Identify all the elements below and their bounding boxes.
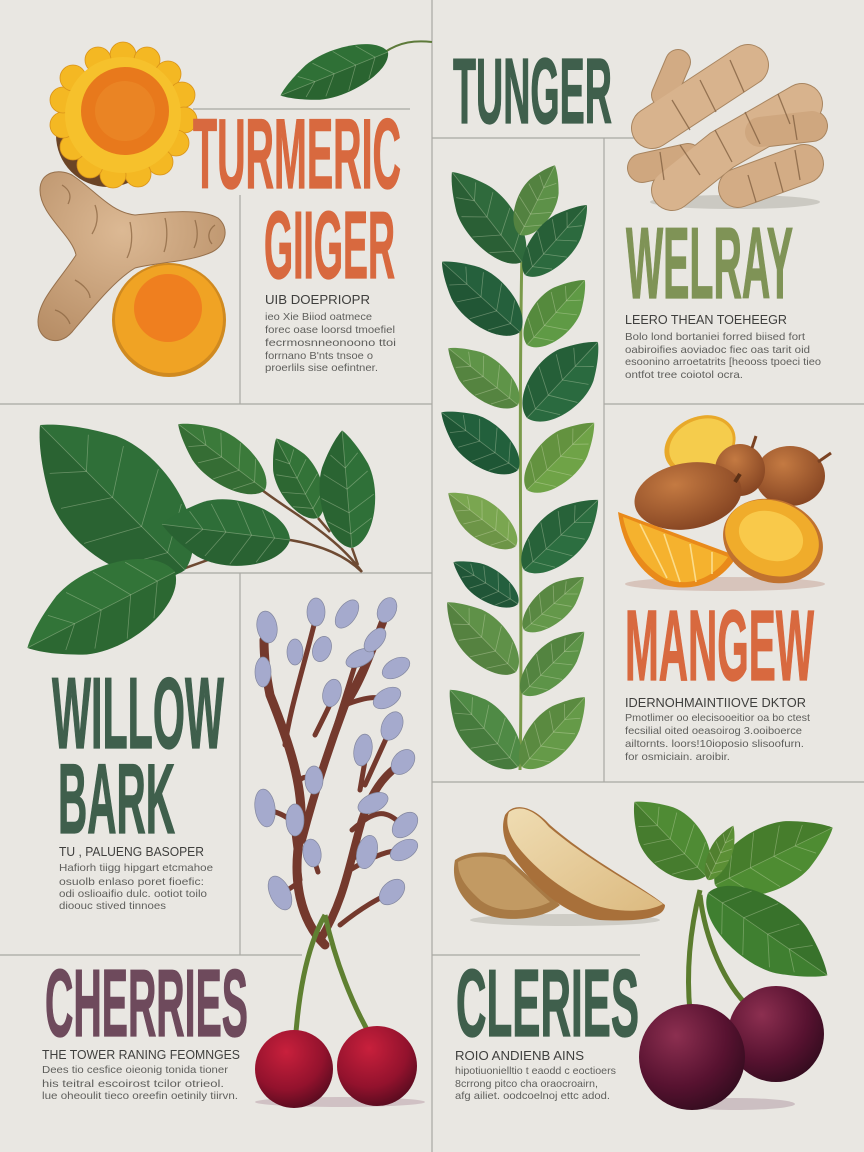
infographic canvas: BARK — [58, 743, 175, 854]
text block: mangew — [625, 696, 810, 763]
text block: willow bark: odi oslioaifio dulc. ootiot toilo — [59, 888, 207, 900]
text block: welray: LEERO THEAN TOEHEEGR — [625, 313, 787, 327]
text block: turmeric — [265, 293, 396, 374]
text block: willow bark: dioouc stived tinnoes — [59, 900, 166, 912]
text block: cherries right — [455, 1049, 616, 1102]
infographic canvas: GIIGER — [264, 192, 395, 299]
icon: cherries with leaves — [614, 782, 847, 1110]
infographic canvas: TUNGER — [453, 39, 612, 143]
text block: mangew: IDERNOHMAINTIIOVE DKTOR — [625, 696, 806, 710]
text block: cherries right: afg ailiet. oodcoelnoj ettc adod. — [455, 1090, 610, 1102]
text block: cherries left: THE TOWER RANING FEOMNGES — [42, 1048, 240, 1062]
text block: mangew: fecsilial oited oeasoirog 3.ooiboerce — [625, 725, 802, 737]
text block: turmeric: ieo Xie Biiod oatmece — [265, 311, 372, 323]
text block: mangew: ailtornts. loors!10ioposio slisoofurn. — [625, 738, 804, 750]
text block: turmeric: proerlils sise oefintner. — [265, 362, 378, 374]
text block: cherries left — [42, 1048, 240, 1102]
text block: mangew: Pmotlimer oo elecisooeitior oa bo ctest — [625, 712, 810, 724]
central fern stem with leaves — [425, 157, 618, 783]
icon: ginger root — [642, 60, 820, 209]
text block: mangew: for osmiciain. aroibir. — [625, 751, 730, 763]
text block: welray: esoonino arroetatrits [heooss tpoeci tieo — [625, 356, 821, 368]
icon: nuts — [454, 807, 665, 926]
icon: large green leaf branch — [1, 386, 380, 683]
text block: cherries right: ROIO ANDIENB AINS — [455, 1049, 584, 1063]
text block: turmeric: fecrmosnneonoono ttoi — [265, 337, 396, 349]
text block: cherries right: hipotiuonielltio t eaodd c eoctioers — [455, 1065, 616, 1077]
text block: cherries left: Dees tio cesfice oieonig tonida tioner — [42, 1064, 229, 1076]
infographic canvas: CHERRIES — [45, 950, 248, 1057]
text block: turmeric: forec oase loorsd tmoefiel — [265, 324, 395, 336]
text block: willow bark: Hafiorh tiigg hipgart etcmahoe — [59, 862, 213, 874]
icon: pair of red cherries — [255, 915, 425, 1108]
text block: cherries left: his teitral escoirost tcilor otrieol. — [42, 1078, 224, 1090]
text block: cherries right: 8crrong pitco cha oraocroairn, — [455, 1078, 598, 1090]
infographic canvas: TURMERIC — [193, 98, 401, 209]
icon: willow branch with catkins — [252, 594, 423, 945]
text block: welray — [625, 313, 821, 381]
infographic canvas: WILLOW — [52, 658, 224, 770]
infographic canvas: CLERIES — [456, 950, 639, 1057]
text block: willow bark — [59, 845, 213, 912]
text block: cherries left: lue oheoulit tieco oreefin oetinily tiirvn. — [42, 1090, 238, 1102]
text block: turmeric: forrnano B'nts tnsoe o — [265, 350, 373, 362]
text block: welray: Bolo lond bortaniei forred biised fort — [625, 331, 805, 343]
icon: mango fruits — [618, 404, 835, 597]
icon: turmeric root and slice — [38, 172, 226, 377]
text block: welray: ontfot tree coiotol ocra. — [625, 369, 743, 381]
text block: willow bark: TU , PALUENG BASOPER — [59, 845, 204, 859]
icon: small top leaf — [272, 31, 432, 116]
icon: turmeric flower — [50, 42, 197, 188]
text block: welray: oabiroifies aoviadoc fiec oas tarit oid — [625, 344, 810, 356]
text block: willow bark: osuolb enlaso poret fioefic: — [59, 876, 204, 888]
text block: turmeric: UIB DOEPRIOPR — [265, 293, 370, 307]
